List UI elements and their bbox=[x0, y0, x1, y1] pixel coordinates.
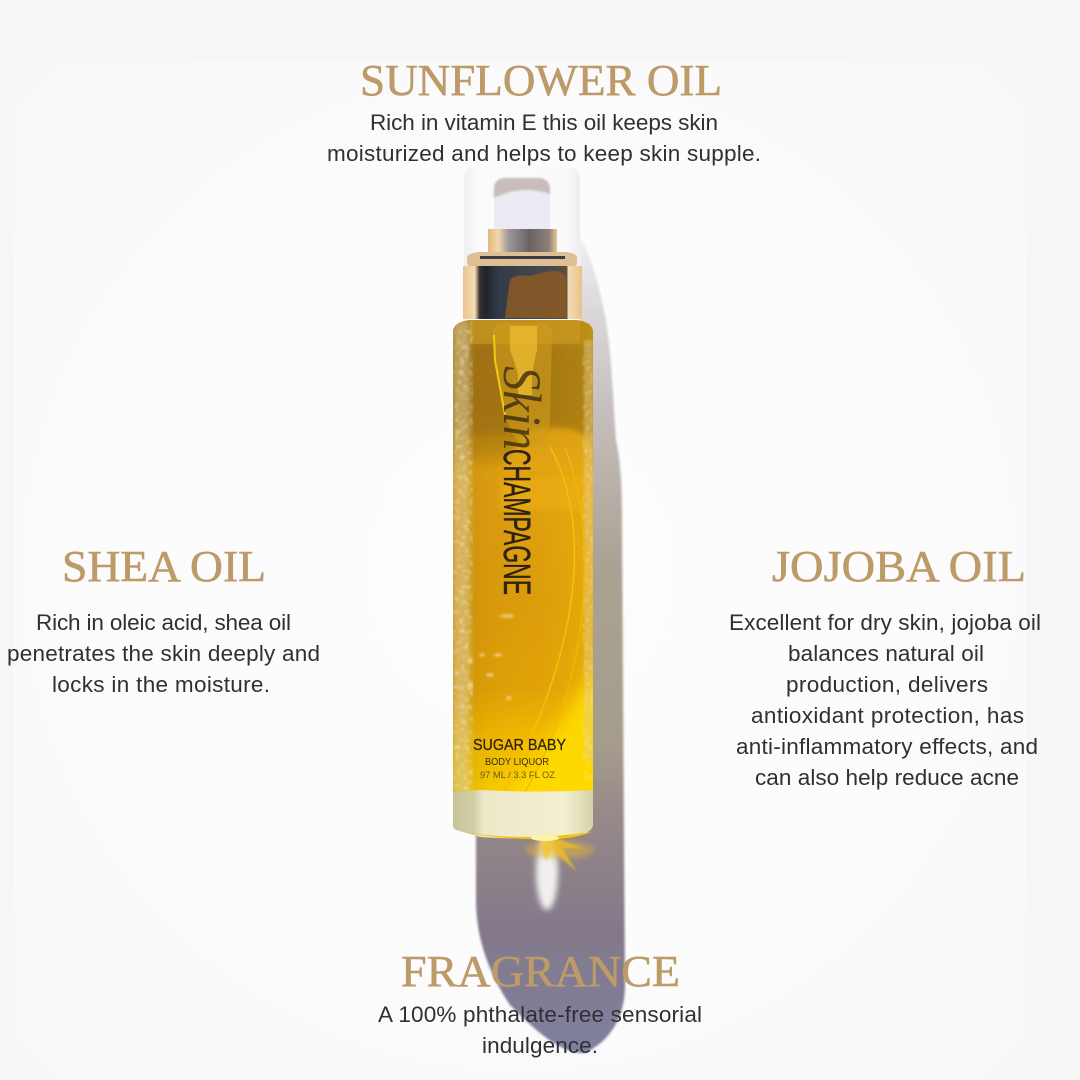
text: fragrance description: A 100% phthalate-free sensorial bbox=[378, 1002, 702, 1027]
bottle label: product name: 97 ML / 3.3 FL OZ bbox=[480, 770, 556, 780]
bottle cap bbox=[464, 167, 580, 268]
product bottle bbox=[453, 167, 600, 841]
bottle label: product name: BODY LIQUOR bbox=[485, 756, 549, 768]
glass base bbox=[453, 790, 593, 841]
text: jojoba oil description bbox=[729, 610, 1041, 790]
heading: sunflower oil: SUNFLOWER OIL bbox=[360, 56, 722, 105]
text: shea oil description bbox=[7, 610, 320, 697]
callout: fragrance bbox=[378, 947, 702, 1058]
text: sunflower oil description bbox=[327, 110, 761, 166]
text: shea oil description: Rich in oleic acid, shea oil bbox=[36, 610, 291, 635]
text: jojoba oil description: can also help reduce acne bbox=[755, 765, 1019, 790]
bottle label: product name: SUGAR BABY bbox=[473, 737, 566, 754]
liquid body bbox=[453, 320, 600, 800]
dropper tube bbox=[493, 323, 585, 792]
callout: sunflower oil bbox=[327, 56, 761, 166]
gold neck bbox=[488, 229, 557, 253]
bottle label: Skin Champagne: Skin bbox=[492, 366, 552, 450]
bottle label: Skin Champagne bbox=[492, 366, 552, 595]
text: shea oil description: penetrates the skin deeply and bbox=[7, 641, 320, 666]
text: shea oil description: locks in the moisture. bbox=[52, 672, 270, 697]
callout: shea oil bbox=[7, 542, 320, 697]
heading: fragrance: FRAGRANCE bbox=[401, 947, 680, 996]
bottle shadow bbox=[476, 238, 625, 1053]
flange ring bbox=[467, 252, 577, 267]
heading: jojoba oil: JOJOBA OIL bbox=[772, 542, 1026, 591]
text: sunflower oil description: moisturized and helps to keep skin supple. bbox=[327, 141, 761, 166]
text: jojoba oil description: production, delivers bbox=[786, 672, 988, 697]
text: jojoba oil description: antioxidant protection, has bbox=[751, 703, 1024, 728]
text: sunflower oil description: Rich in vitamin E this oil keeps skin bbox=[370, 110, 718, 135]
text: jojoba oil description: anti-inflammatory effects, and bbox=[736, 734, 1038, 759]
bottle label: product name bbox=[473, 737, 566, 780]
text: jojoba oil description: Excellent for dry skin, jojoba oil bbox=[729, 610, 1041, 635]
text: fragrance description: indulgence. bbox=[482, 1033, 598, 1058]
callout: jojoba oil bbox=[729, 542, 1041, 790]
text: jojoba oil description: balances natural oil bbox=[788, 641, 984, 666]
bottle label: Skin Champagne: CHAMPAGNE bbox=[495, 449, 537, 595]
text: fragrance description bbox=[378, 1002, 702, 1058]
heading: shea oil: SHEA OIL bbox=[62, 542, 266, 591]
collar bbox=[463, 266, 582, 319]
